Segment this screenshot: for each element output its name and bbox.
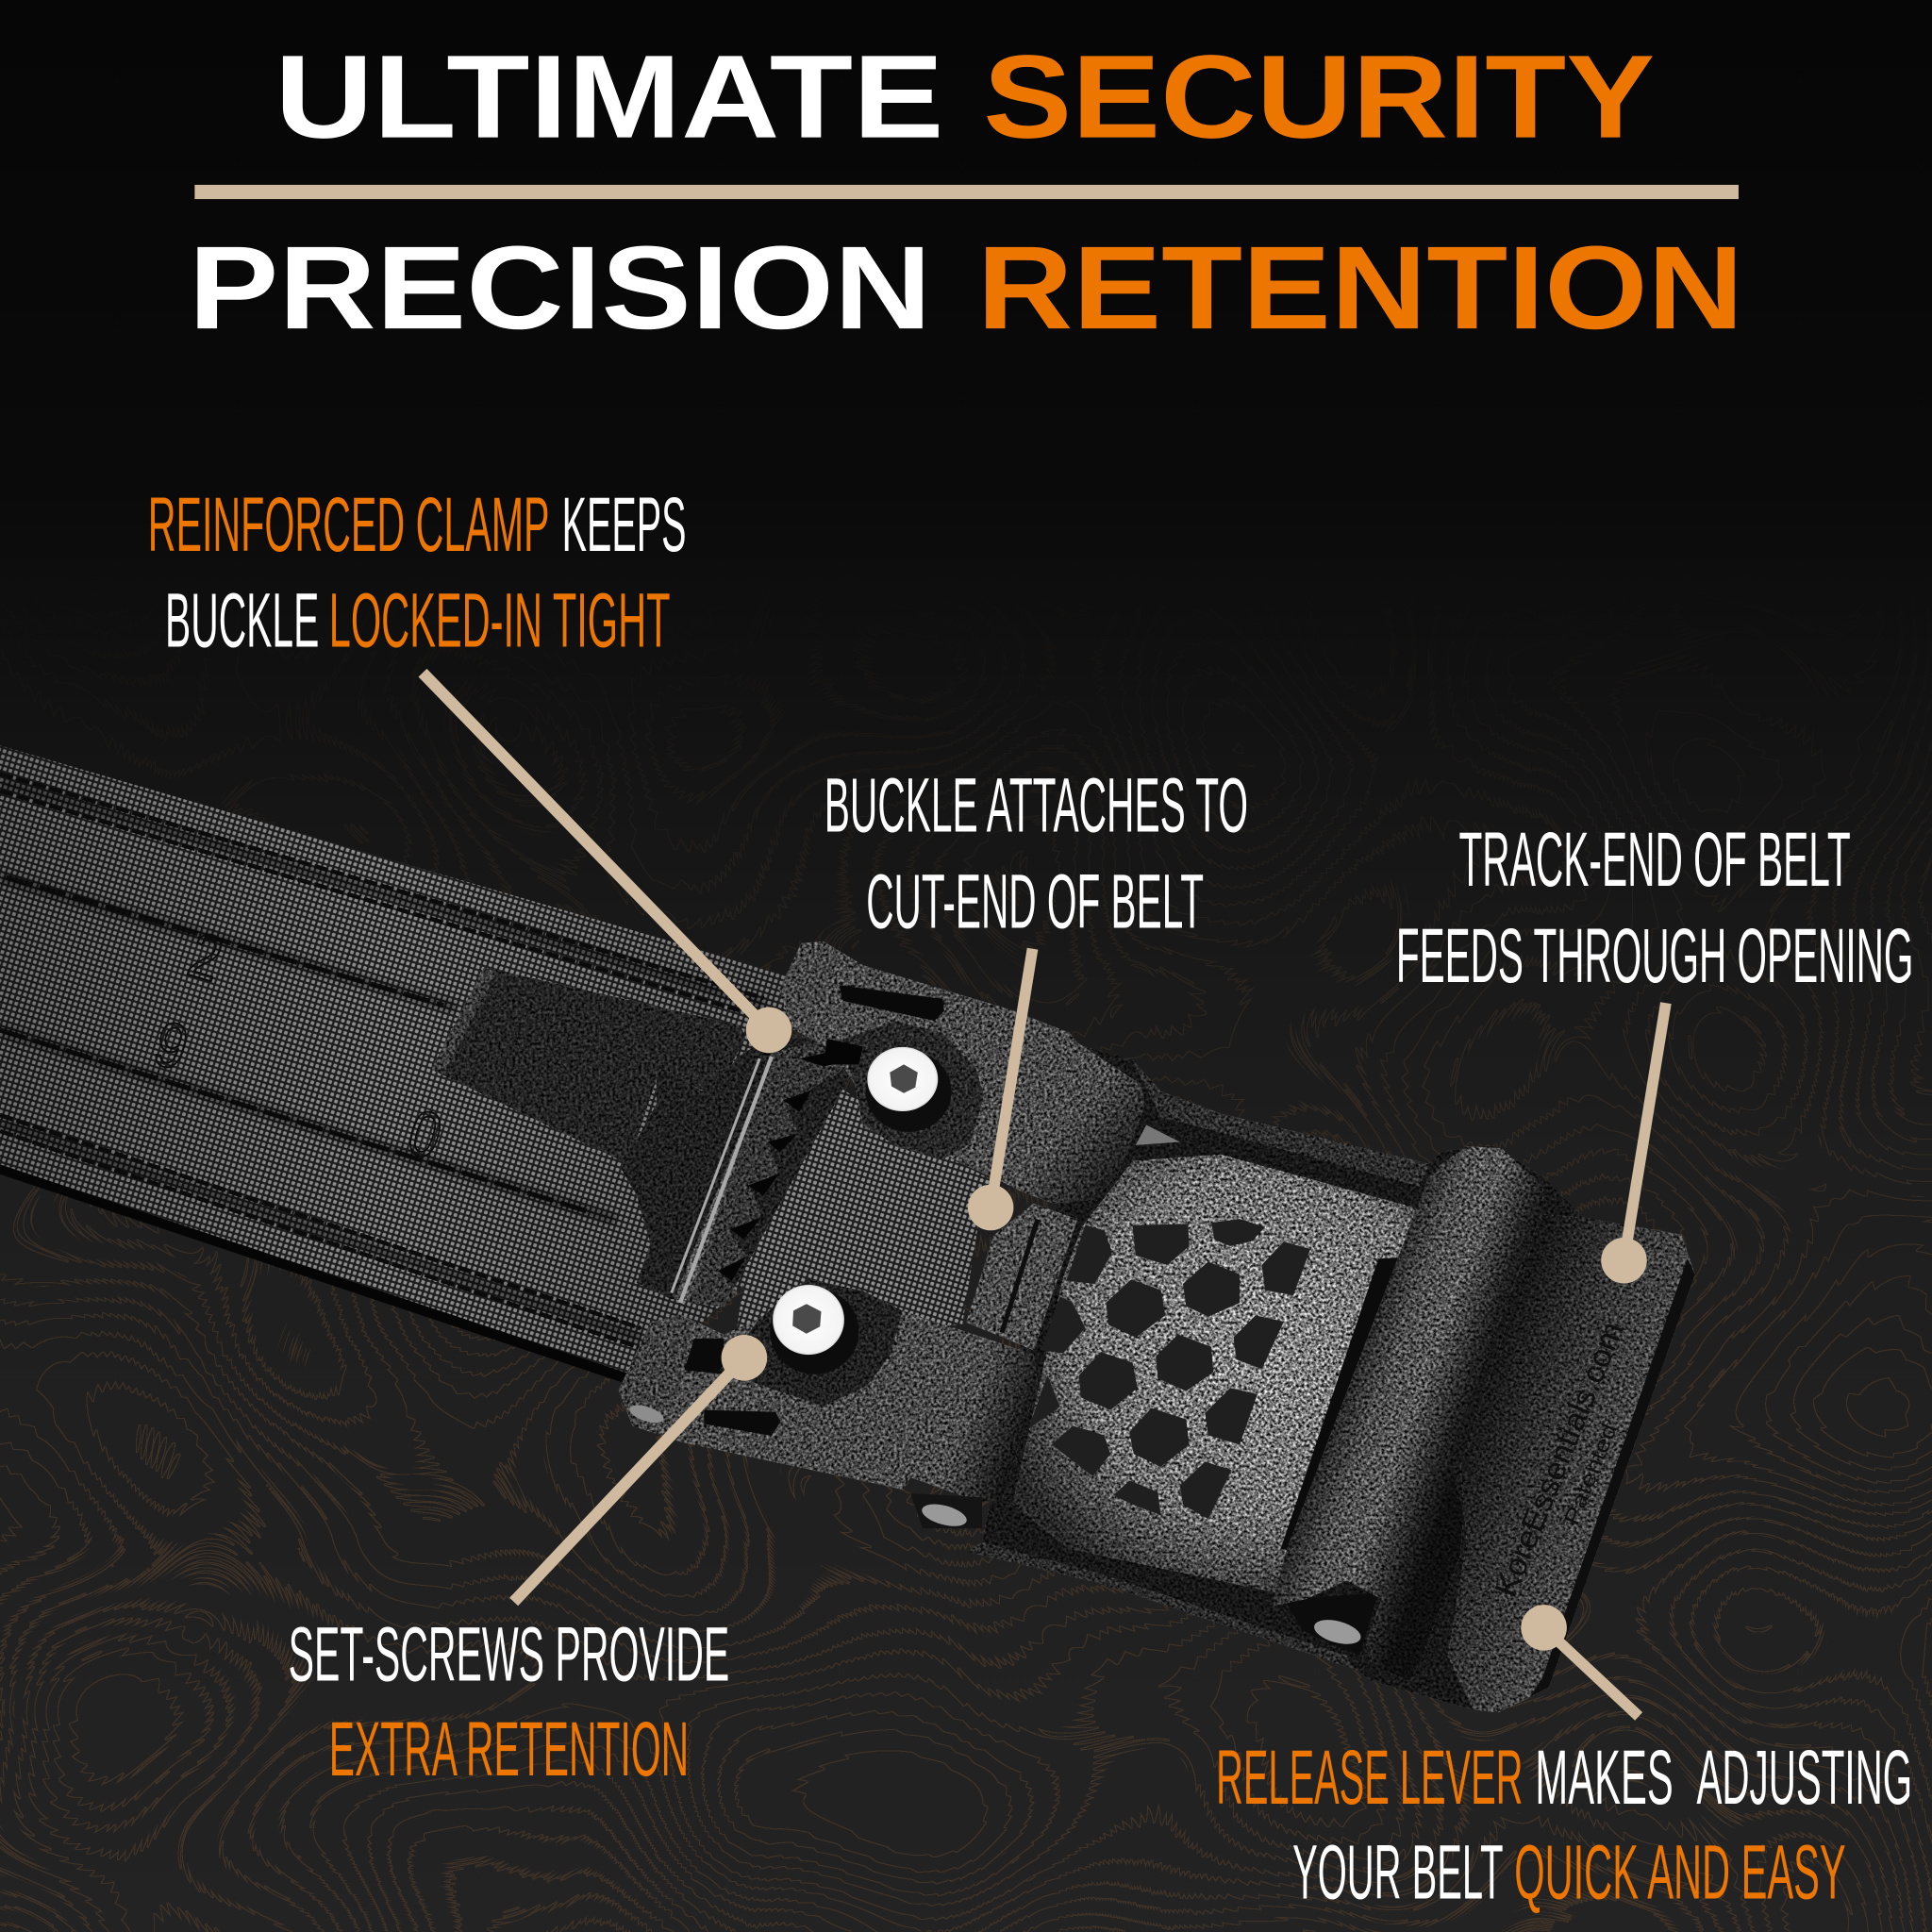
belt strap: [0, 745, 789, 1389]
clamp highlight strip: [672, 1057, 772, 1303]
top slot: [839, 985, 944, 1021]
heading line 2: [189, 221, 1743, 354]
cut-end channel: [966, 1204, 1077, 1350]
set screw boss: [839, 1021, 984, 1159]
callout: reinforced clamp: REINFORCED CLAMP: [148, 482, 550, 568]
upper clamp block: [779, 941, 1145, 1204]
pivot bolt: [1284, 1592, 1378, 1656]
bottom rail: [969, 1542, 1353, 1669]
callout: release lever: [1216, 1735, 1912, 1916]
pointer: reinforced clamp: [423, 673, 791, 1053]
lower clamp block: [619, 1279, 1038, 1530]
heading divider: [194, 185, 1739, 199]
serrated teeth: [688, 1041, 858, 1307]
lower slot: [704, 1410, 780, 1436]
top rail: [1133, 1060, 1429, 1186]
heading line 1: [275, 30, 1655, 163]
title: [189, 30, 1743, 354]
pointer: track-end: [1601, 1003, 1666, 1283]
pointer: buckle attaches: [968, 949, 1033, 1230]
heading line 1: ULTIMATE: [275, 30, 943, 163]
set screw boss: [720, 1279, 903, 1406]
callout: reinforced clamp: [148, 482, 687, 664]
callout: set-screws: SET-SCREWS PROVIDE: [289, 1612, 729, 1698]
clamp lit face: [675, 1055, 791, 1303]
callout: set-screws: [289, 1612, 729, 1792]
callout: buckle attaches: [824, 763, 1248, 945]
pointer: release lever: [1521, 1605, 1639, 1716]
embossed size numbers: 0: [400, 1096, 450, 1174]
honeycomb holes: [1028, 1219, 1310, 1519]
callout: release lever: YOUR BELT: [1292, 1830, 1503, 1916]
text: BUCKLE ATTACHES TO: [824, 763, 1248, 849]
release lever: [1448, 1214, 1695, 1713]
embossed size numbers: 9: [146, 1008, 196, 1085]
set screw: [773, 1285, 844, 1355]
edge screws: [627, 1402, 666, 1426]
plate groove: [1281, 1257, 1403, 1552]
clamped belt insert: [736, 1077, 998, 1337]
embossed size numbers: 2: [181, 919, 230, 996]
dark clamp base: [621, 1033, 863, 1307]
pointer: set-screws: [514, 1335, 767, 1602]
heading line 2: PRECISION: [189, 221, 931, 354]
belt creases: [0, 877, 591, 1212]
callout: track-end: [1396, 817, 1913, 999]
stitching grooves: [0, 782, 764, 1338]
text: KEEPS: [562, 482, 687, 568]
callout: reinforced clamp: LOCKED-IN TIGHT: [329, 578, 671, 664]
clamp and set-screw assembly: [619, 941, 1145, 1530]
frame silhouette: [981, 1044, 1695, 1713]
tooth shadows: [718, 1044, 863, 1281]
lever engraving: KoreEssentials.com: [1489, 1317, 1631, 1602]
belt clip flap: [431, 967, 745, 1164]
callout: buckle attaches: CUT-END OF BELT: [866, 859, 1204, 945]
heading line 1: SECURITY: [983, 30, 1655, 163]
topographic contour texture: [0, 781, 1932, 1932]
buckle frame, plate and lever: [969, 1044, 1695, 1713]
perforated plate: [1012, 1124, 1416, 1592]
stitching: [0, 774, 764, 1348]
set screw: [867, 1047, 938, 1111]
roller bar: [1274, 1146, 1543, 1681]
callout: reinforced clamp: BUCKLE: [165, 578, 319, 664]
callout: set-screws: EXTRA RETENTION: [329, 1707, 689, 1792]
embossed size numbers: [146, 919, 450, 1174]
heading line 2: RETENTION: [977, 221, 1743, 354]
lever engraving: Patented: [1558, 1420, 1622, 1528]
callout: release lever: MAKES: [1535, 1735, 1674, 1821]
callout: release lever: RELEASE LEVER: [1216, 1735, 1523, 1821]
